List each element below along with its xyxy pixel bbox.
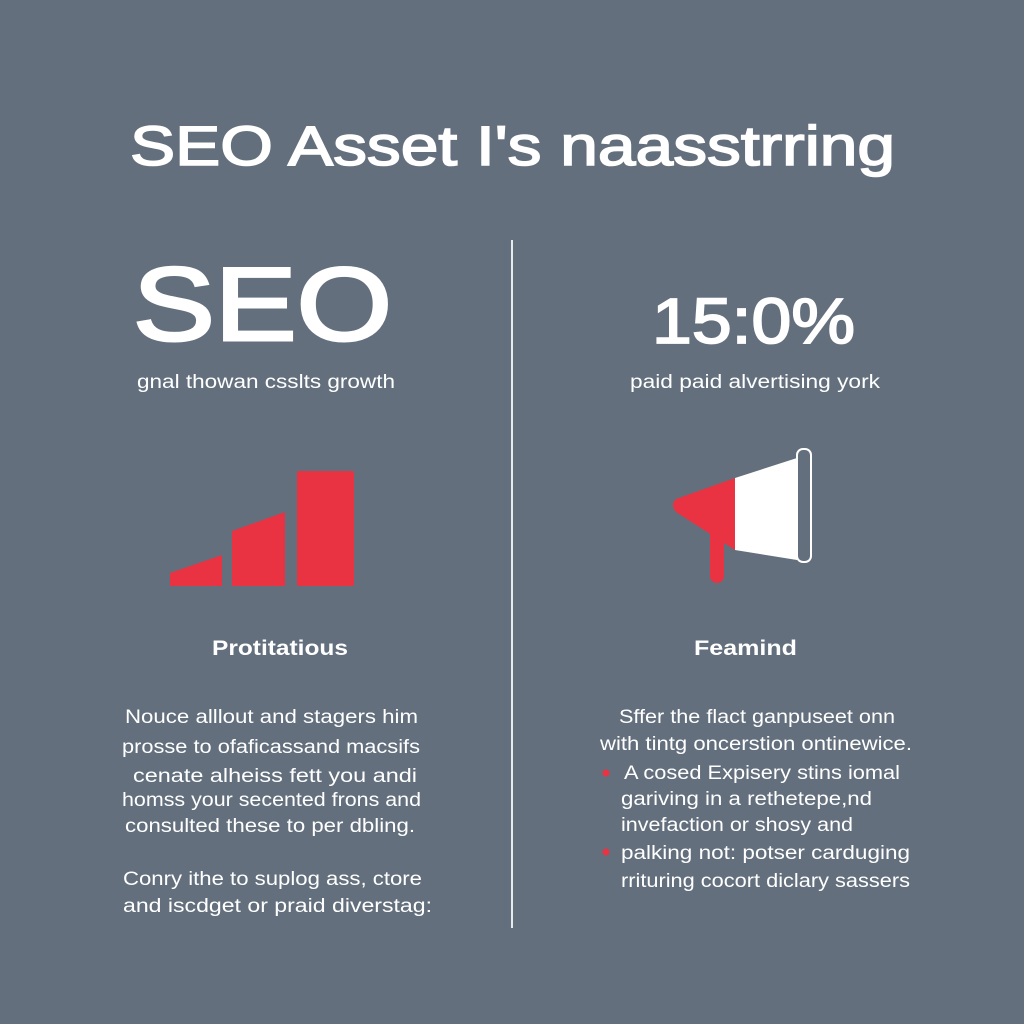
title: SEO Asset I's naasstrring xyxy=(130,114,895,177)
right paragraph xyxy=(599,707,912,892)
big stat SEO: SEO xyxy=(133,247,392,363)
left paragraph: Nouce alllout and stagers him xyxy=(125,707,418,728)
right paragraph: gariving in a rethetepe,nd xyxy=(621,789,872,810)
left heading: Protitatious xyxy=(212,637,348,660)
right paragraph: Sffer the flact ganpuseet onn xyxy=(619,707,895,728)
left paragraph: prosse to ofaficassand macsifs xyxy=(122,737,420,758)
icon: megaphone xyxy=(673,449,811,583)
left paragraph: consulted these to per dbling. xyxy=(125,816,415,837)
right paragraph: with tintg oncerstion ontinewice. xyxy=(599,734,912,755)
left paragraph: cenate alheiss fett you andi xyxy=(133,766,417,787)
right paragraph: palking not: potser carduging xyxy=(621,843,910,864)
left paragraph xyxy=(122,707,432,917)
right paragraph: A cosed Expisery stins iomal xyxy=(624,763,900,784)
big stat 15:0%: 15:0% xyxy=(652,285,855,357)
panel: left SEO xyxy=(122,247,432,917)
left paragraph: homss your secented frons and xyxy=(122,790,421,811)
right paragraph: invefaction or shosy and xyxy=(621,815,853,836)
left subtitle: gnal thowan csslts growth xyxy=(137,372,395,393)
right subtitle: paid paid alvertising york xyxy=(630,372,881,393)
left paragraph: Conry ithe to suplog ass, ctore xyxy=(123,869,422,890)
left paragraph: and iscdget or praid diverstag: xyxy=(123,896,432,917)
right paragraph: rrituring cocort diclary sassers xyxy=(621,871,910,892)
right heading: Feamind xyxy=(694,637,797,660)
panel: right paid xyxy=(599,285,912,892)
icon: bar chart xyxy=(170,471,354,586)
